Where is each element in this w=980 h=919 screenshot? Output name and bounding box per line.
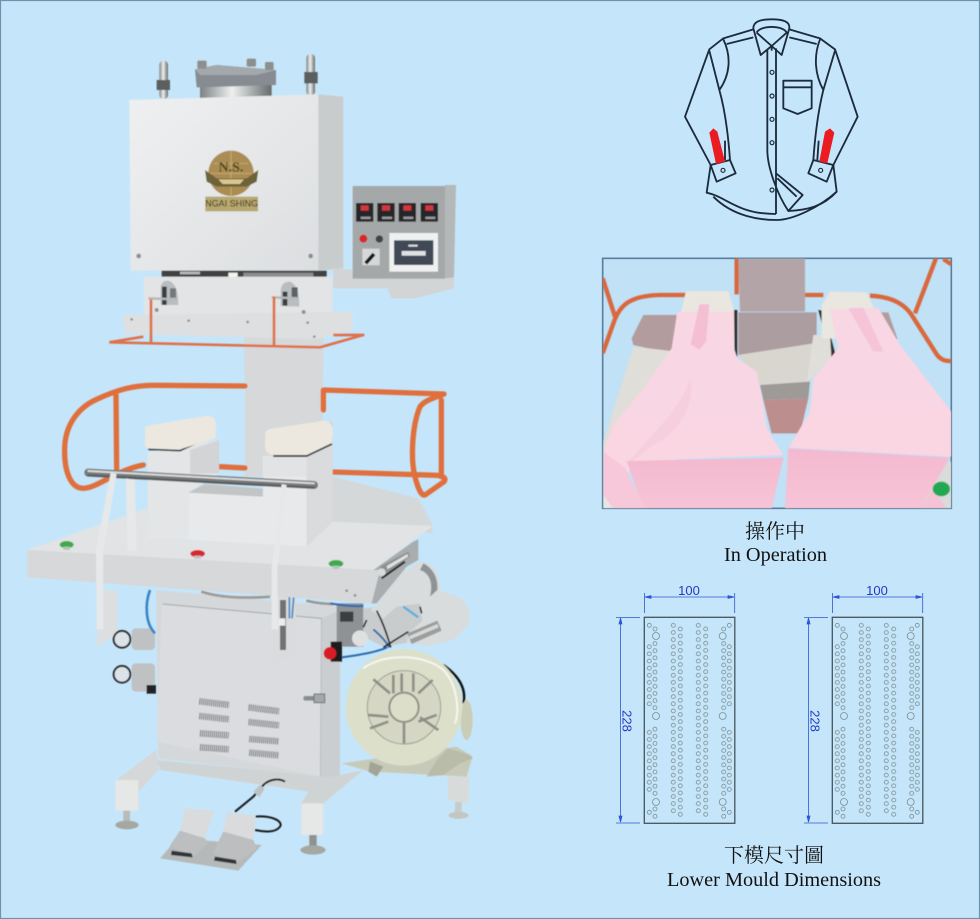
logo name plate [205,197,258,211]
ring blower [342,649,473,777]
dimension arrow: height 228 [616,618,640,823]
machine middle section: rail, table and moulds [27,370,445,629]
lower mould dimension drawing, left [616,583,735,823]
mould outline and holes [644,617,735,823]
cabinet door [156,590,340,777]
photo: moulds [681,290,735,312]
photo: table and centre block [632,315,677,355]
photo: right sleeve [789,308,951,457]
shirt line drawing with red cuff plackets [685,19,858,220]
dimension arrow: height 228 [804,618,828,823]
orange safety rail [65,385,445,495]
table top [27,508,433,570]
logo name plate: NGAI SHING [205,199,258,209]
cable connector [253,785,265,797]
green button left [60,541,74,550]
mould outline and holes [832,617,923,823]
caption: lower mould dimensions: Lower Mould Dimensions [667,869,881,891]
machine logo: N.S. [219,161,243,176]
foot pedal cable [235,779,285,831]
green button right [329,560,343,569]
dimension arrow: height 228: 228 [808,710,822,732]
dimension arrow: width 100: 100 [866,583,888,598]
photo: left sleeve [603,312,783,485]
pneumatic fittings and pipes [330,562,470,658]
shirt placket [767,48,803,214]
left mould block [145,416,219,540]
caption: in operation [724,520,827,566]
panel: in-operation photo [603,258,951,508]
shirt collar [753,19,789,55]
photo: hanging shirt fronts [627,458,783,508]
press housing [129,94,343,271]
machine lower section: cabinet, blower and pedals [97,562,473,871]
lower mould dimension drawing, right [804,583,923,823]
control panel bracket [333,268,454,298]
dimension arrow: height 228: 228 [620,710,634,732]
table screws [345,589,356,597]
cuffs [711,141,833,182]
dimension arrow: width 100 [832,583,923,613]
centre handle bracket [273,590,297,664]
table front edge [27,550,380,603]
dimension arrow: width 100 [644,583,735,613]
stainless handle bar [88,471,314,488]
red button centre [190,550,205,559]
control panel [353,185,456,279]
photo: orange rail [603,258,951,361]
handle straps [96,473,287,629]
column top [244,337,323,373]
shirt pocket [783,81,812,114]
shirt yoke and armholes [709,37,835,90]
cabinet legs and base [115,750,469,855]
press lower mechanism [123,271,352,339]
shirt buttons [721,70,823,192]
dimension arrow: width 100: 100 [678,583,700,598]
shirt body and sleeves [685,29,858,214]
guide rods [157,54,318,99]
foot pedals [160,808,262,871]
centre block [188,470,307,547]
table side shade [370,539,418,603]
support column [245,370,333,477]
caption: in operation: 操作中 [745,520,805,543]
side piston [378,552,410,578]
upper orange rail [109,297,363,347]
machine: cuff press [27,54,473,871]
caption: in operation: In Operation [724,544,827,566]
cabinet vents [199,701,279,755]
back panel [333,477,433,533]
emergency stop button [324,642,342,662]
under-table bellows [202,592,333,604]
machine top section: press, logo and control panel [109,54,456,373]
machine logo [205,151,258,196]
caption: lower mould dimensions: 下模尺寸圖 [724,844,824,867]
caption: lower mould dimensions [667,844,881,891]
air cylinder [195,59,276,100]
door latch [303,694,325,703]
right mould block [263,421,333,547]
air regulators and gauges [97,590,156,694]
red marking right cuff [819,128,834,163]
photo: green button [933,482,950,496]
red marking left cuff [709,128,725,164]
